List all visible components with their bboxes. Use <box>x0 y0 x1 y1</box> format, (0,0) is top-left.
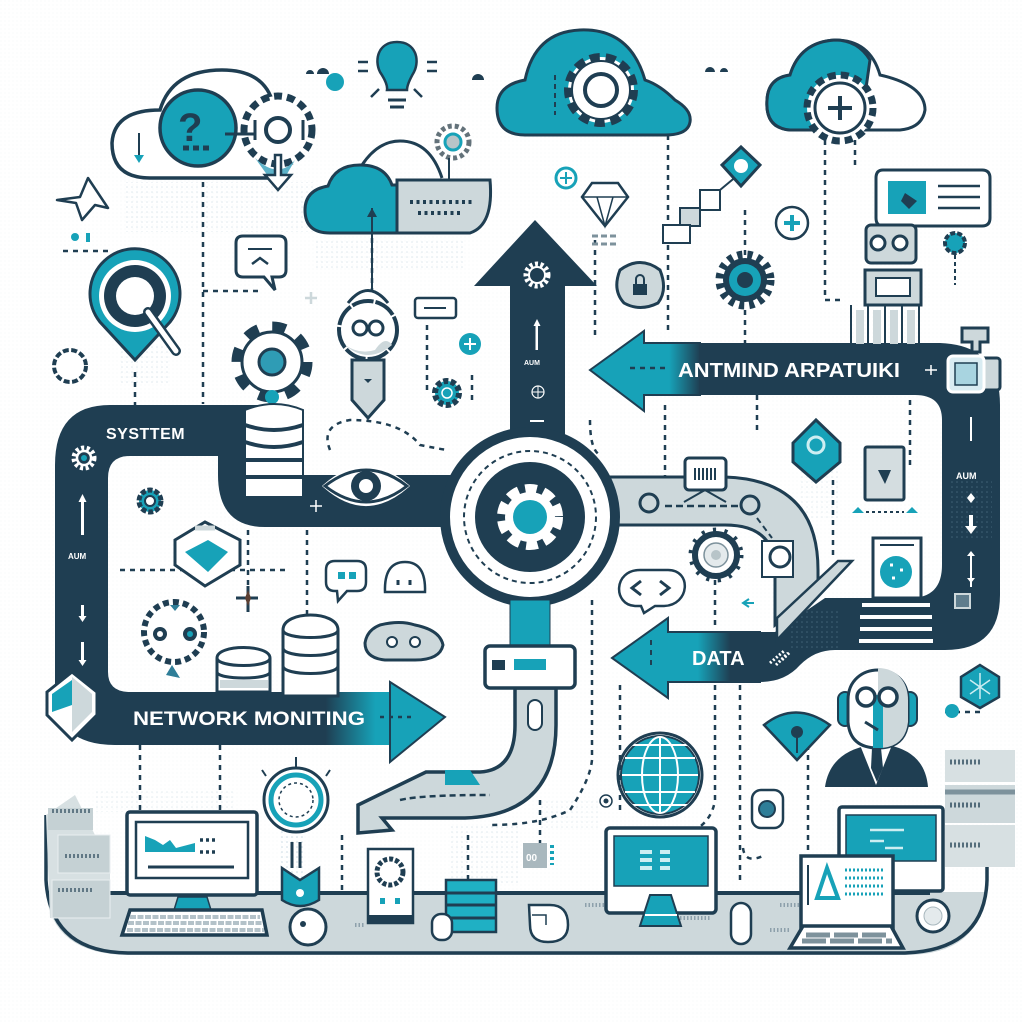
band markers: right aum: AUM <box>956 471 976 481</box>
icon: message bubbles <box>326 561 425 601</box>
icon: small target <box>600 795 612 807</box>
icon: large gear <box>238 328 306 404</box>
icon: isometric cube <box>175 522 240 586</box>
icon: origami bird <box>57 178 108 242</box>
icon: teal hexagon gem <box>722 147 760 186</box>
gray chevron <box>777 561 852 640</box>
icon: magnifier ring <box>262 757 330 868</box>
icon: monitor center <box>606 828 716 926</box>
icon: database stacks <box>217 615 338 696</box>
icon: compass cross <box>236 586 258 612</box>
icon: code bubble <box>619 570 685 613</box>
cloud: teal with panel <box>305 126 491 290</box>
central hub <box>445 432 615 602</box>
icon: plus badge <box>459 333 481 355</box>
arrow: data <box>612 618 790 698</box>
gray process band <box>600 458 852 640</box>
label: system: SYSTTEM <box>106 426 185 443</box>
icon: diamond <box>582 183 628 244</box>
icon: shield on band <box>47 672 97 740</box>
icon: pin gear <box>225 96 312 190</box>
icon: cloud blob <box>365 622 443 660</box>
icon: globe <box>618 733 702 817</box>
icon: dark cog <box>692 531 740 579</box>
icon: robot <box>851 225 965 345</box>
arrow: data: DATA <box>692 648 745 670</box>
icon: phone on band with steps <box>859 538 933 641</box>
icon: smartphone <box>368 849 413 923</box>
icon: small teal arrow <box>743 599 754 607</box>
arrow: network monitoring <box>130 682 445 762</box>
icon: pill capsule <box>731 903 751 944</box>
icon: teal funnel <box>282 868 319 906</box>
icon: location search pin <box>90 249 180 360</box>
icon: eye <box>310 468 407 512</box>
left loop band <box>55 405 460 745</box>
icon: small gear <box>437 126 469 180</box>
left server rack <box>46 795 110 918</box>
icon: tiny cog <box>139 490 161 512</box>
icon: mouse <box>290 909 326 945</box>
icon: person with headset <box>825 668 928 787</box>
arrow: antmind <box>590 331 937 411</box>
icon: face gear <box>144 602 204 678</box>
icon: tablet <box>852 447 918 513</box>
icon: teal wifi shield <box>764 712 830 760</box>
icon: camera badge <box>752 790 783 828</box>
arrow: network monitoring: NETWORK MONITING <box>133 709 365 730</box>
arrow: upward: AUM <box>524 360 540 367</box>
process nodes <box>640 494 772 538</box>
cloud: question: ? <box>178 106 202 150</box>
icon: mini image tag: 00 <box>526 853 538 864</box>
icon: database stack on band <box>245 404 303 497</box>
floor platform <box>46 750 1015 955</box>
icon: plus gear badge <box>776 207 808 239</box>
teal stem <box>510 600 550 648</box>
dashed connector lines <box>63 125 985 920</box>
right server rack <box>945 750 1015 867</box>
icon: band gear <box>74 448 94 468</box>
icon: keyboard <box>122 910 267 935</box>
speech card <box>876 170 990 238</box>
cloud: gear center <box>497 30 690 135</box>
icon: tag box <box>415 298 456 318</box>
icon: lightbulb <box>358 42 437 107</box>
small dots and marks <box>305 67 728 304</box>
icon: round speaker <box>917 900 949 932</box>
icon: stacked windows <box>663 175 738 243</box>
stipple shading patches <box>95 182 840 900</box>
icon: chat bubble <box>236 236 286 290</box>
gray downward arrow <box>358 688 556 833</box>
arrow: antmind: ANTMIND ARPATUIKI <box>678 360 900 382</box>
icon: outline mouse <box>529 905 568 942</box>
icon: outline gear left <box>54 350 86 382</box>
icon: teal ring gear <box>720 255 770 305</box>
connector pill <box>485 646 575 688</box>
band markers: aum <box>68 494 87 666</box>
icon: teal shield tag <box>793 420 840 482</box>
icon: teal server stack <box>432 880 496 940</box>
arrow: upward <box>474 220 597 440</box>
icon: teal cog <box>435 381 459 405</box>
icon: gear tile <box>762 541 793 577</box>
icon: plus badge top <box>556 168 576 188</box>
cloud: question <box>112 70 312 190</box>
band markers: right aum <box>955 417 977 608</box>
icon: teal badge <box>945 665 999 718</box>
icon: brain pen <box>339 290 397 418</box>
cloud: plus gear <box>767 40 925 141</box>
icon: barcode monitor <box>684 458 726 502</box>
band markers: aum: AUM <box>68 552 87 561</box>
icon: monitor left <box>127 812 257 910</box>
icon: padlock blob <box>617 262 664 308</box>
icon: mini image tag <box>523 843 552 868</box>
icon: monitor right <box>839 807 943 891</box>
icon: chip on band <box>948 328 1000 392</box>
right loop band <box>590 331 1000 698</box>
icon: laptop <box>790 856 903 948</box>
